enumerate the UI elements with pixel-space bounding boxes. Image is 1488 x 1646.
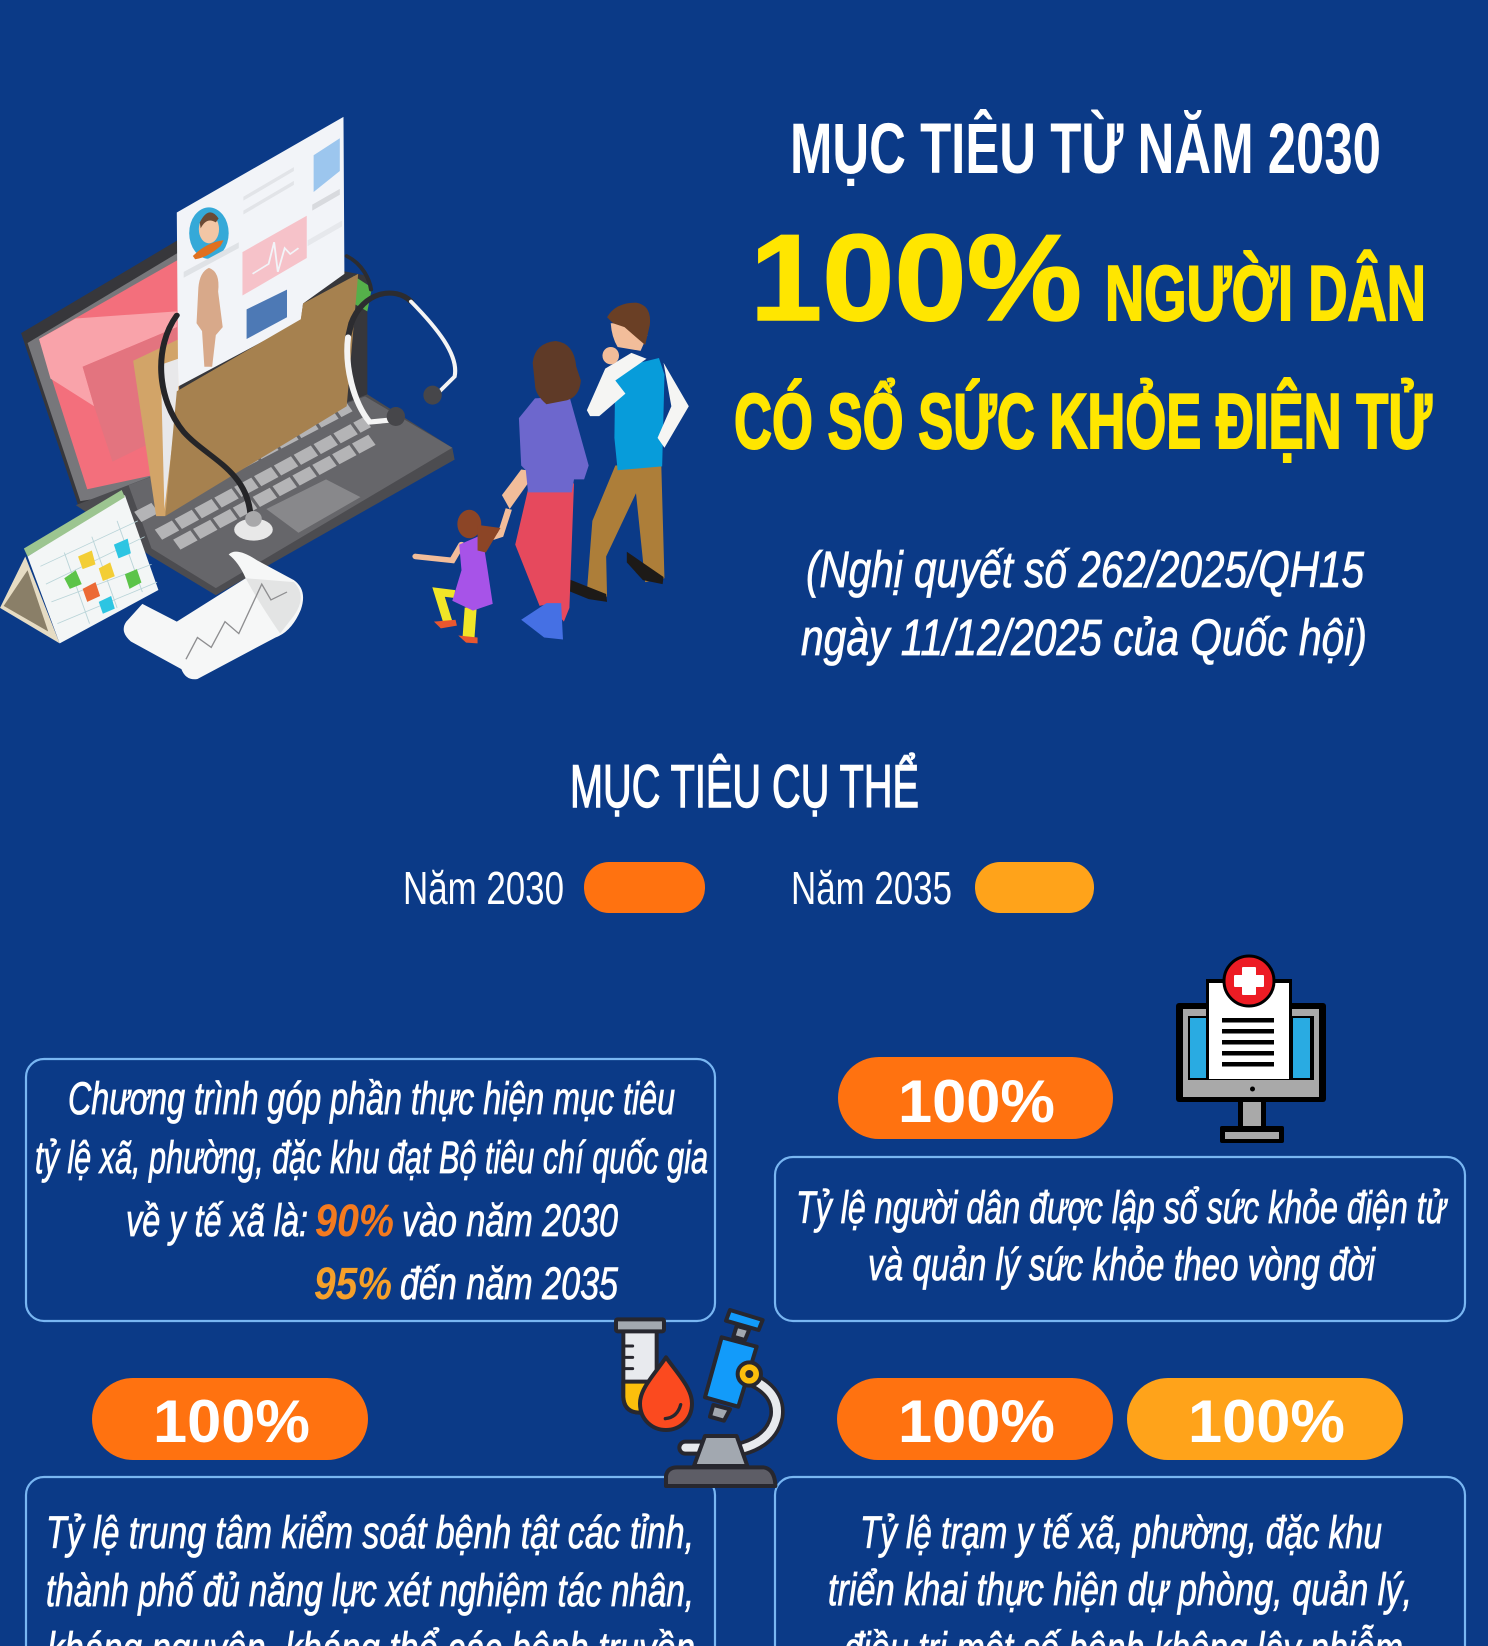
panel: electronic health record rate xyxy=(775,1157,1465,1321)
medical record paper xyxy=(177,117,344,386)
stethoscope xyxy=(161,256,455,541)
panel: national criteria on commune health: đến năm 2035 xyxy=(400,1258,619,1309)
folder back and inner sheet xyxy=(133,339,179,516)
badge: 100% in 2030 for commune health stations xyxy=(837,1378,1113,1460)
laptop lid xyxy=(21,239,372,505)
illustration: laptop with medical record folder, stethoscope, calendar, ECG paper xyxy=(0,117,455,679)
panel: national criteria on commune health: 90% xyxy=(315,1195,394,1246)
headline: 100% of people xyxy=(750,210,1426,347)
subtitle: resolution reference xyxy=(801,541,1367,666)
panel: disease control centre testing capacity: thành phố đủ năng lực xét nghiệm tác nhân, xyxy=(46,1565,694,1616)
heading: specific targets: MỤC TIÊU CỤ THỂ xyxy=(570,753,919,820)
icon: monitor with medical document xyxy=(1176,956,1326,1143)
panel: national criteria on commune health xyxy=(26,1059,715,1321)
panel: national criteria on commune health: về y tế xã là: xyxy=(126,1195,308,1246)
girl xyxy=(416,509,509,643)
panel: commune health stations non-communicable disease xyxy=(775,1477,1465,1646)
badge: 100% in 2035 for commune health stations: 100% xyxy=(1188,1388,1345,1455)
legend: year 2030: Năm 2030 xyxy=(403,862,564,914)
icon: test tube, blood drop and microscope xyxy=(616,1310,777,1486)
badge: 100% for disease control centres: 100% xyxy=(153,1388,310,1455)
man xyxy=(569,303,689,602)
illustration: family of three xyxy=(416,303,689,643)
panel: national criteria on commune health: Chương trình góp phần thực hiện mục tiêu xyxy=(68,1073,675,1124)
badge: 100% for electronic health record: 100% xyxy=(898,1068,1055,1135)
badge: 100% in 2030 for commune health stations: 100% xyxy=(898,1388,1055,1455)
headline: 100% of people: 100% xyxy=(750,210,1082,347)
woman xyxy=(502,341,589,639)
legend: year 2035: Năm 2035 xyxy=(791,862,952,914)
badge: 100% for disease control centres xyxy=(92,1378,368,1460)
panel: disease control centre testing capacity: Tỷ lệ trung tâm kiểm soát bệnh tật các tỉnh, xyxy=(46,1507,694,1558)
panel: national criteria on commune health: tỷ lệ xã, phường, đặc khu đạt Bộ tiêu chí quốc gia xyxy=(35,1132,708,1183)
badge: 100% for electronic health record xyxy=(838,1057,1113,1139)
badge: 100% in 2035 for commune health stations xyxy=(1127,1378,1403,1460)
microscope xyxy=(666,1310,777,1486)
test tube xyxy=(616,1319,664,1413)
ECG paper roll xyxy=(124,552,303,679)
laptop base with keyboard xyxy=(76,394,455,595)
panel: national criteria on commune health: vào năm 2030 xyxy=(402,1195,618,1246)
subtitle: resolution reference: ngày 11/12/2025 của Quốc hội) xyxy=(801,609,1367,666)
blood drop xyxy=(640,1357,692,1430)
calendar xyxy=(0,490,158,643)
panel: disease control centre testing capacity xyxy=(26,1477,715,1646)
folder front xyxy=(165,274,358,516)
panel: national criteria on commune health: 95% xyxy=(314,1258,392,1309)
